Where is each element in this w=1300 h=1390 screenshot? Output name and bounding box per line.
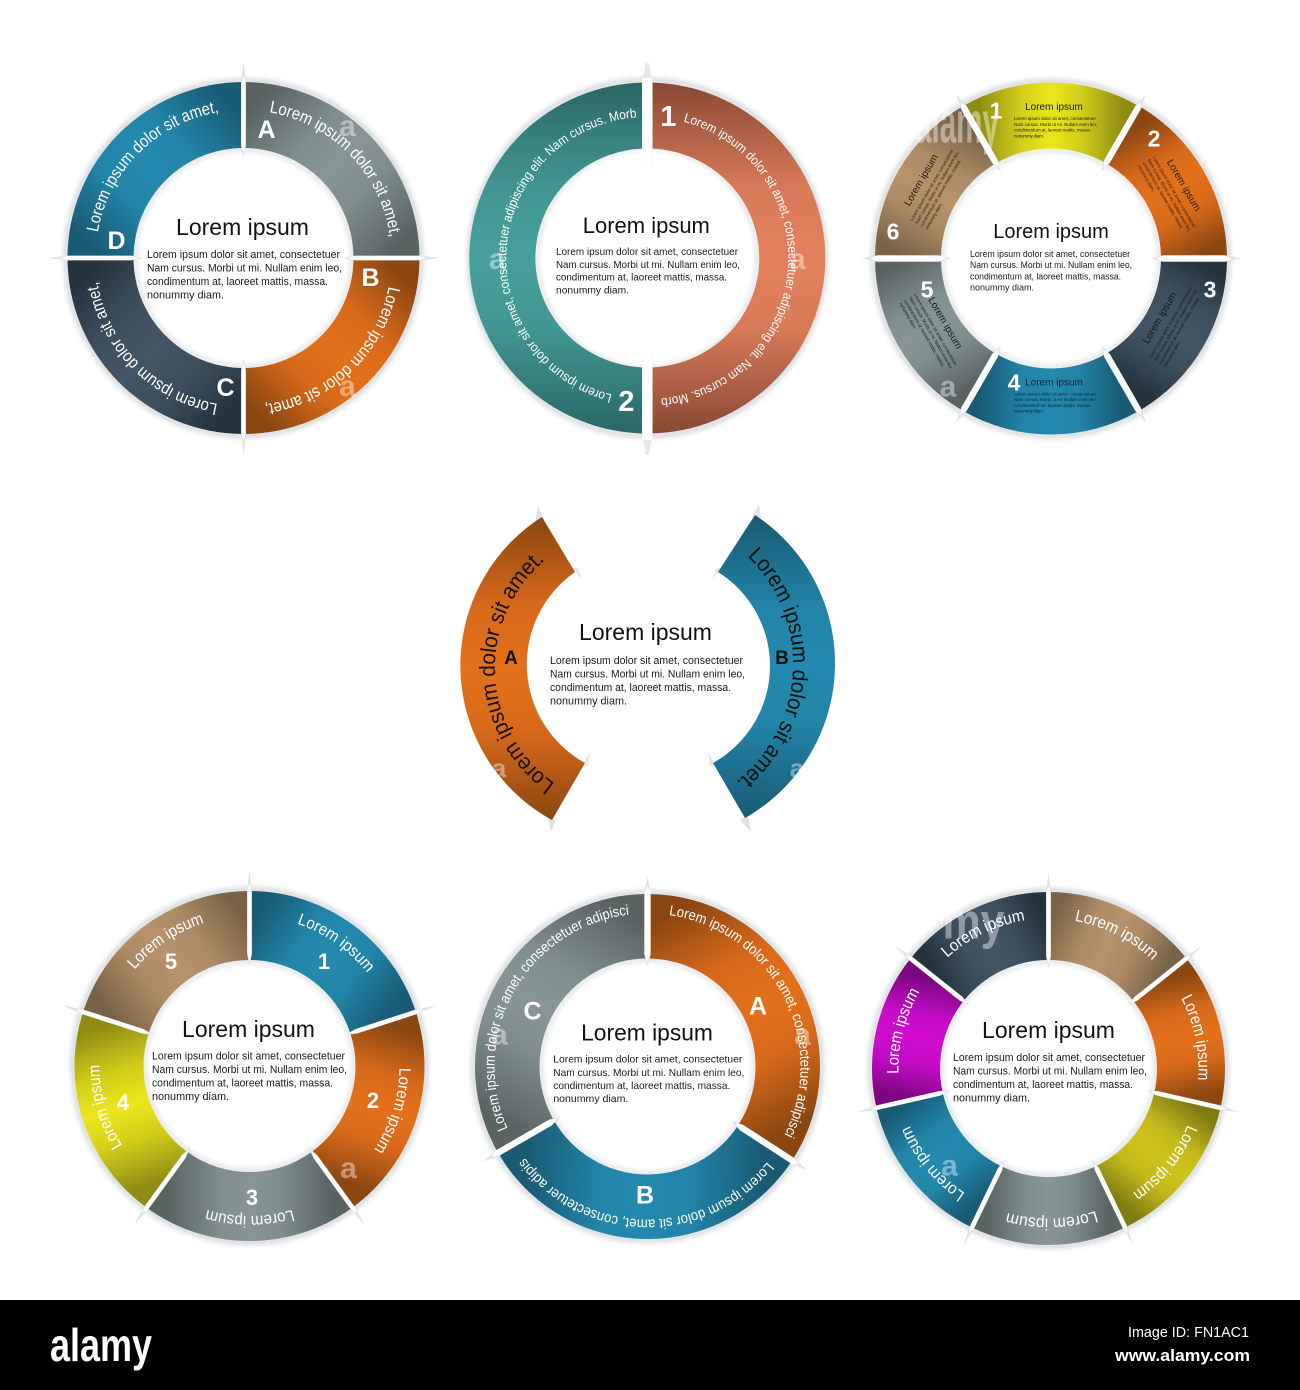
center text: Lorem ipsum dolor sit amet, consectetuer: [152, 1050, 345, 1062]
segment C: [68, 260, 242, 434]
segment 2: 2: [367, 1088, 379, 1113]
segment 3: [1106, 258, 1227, 411]
watermark: a: [941, 1150, 958, 1182]
center text: [553, 1020, 744, 1105]
segment 5: 5: [165, 949, 177, 974]
segment 5: nonummy diam.: [898, 301, 918, 330]
center text: nonummy diam.: [970, 282, 1034, 292]
segment 6: Lorem ipsum dolor sit amet, consectetuer: [909, 148, 955, 222]
center text: condimentum at, laoreet mattis, massa.: [147, 276, 328, 288]
watermark letters: a: [492, 753, 507, 783]
watermark letters: [489, 243, 806, 276]
segment 4: [74, 1014, 186, 1206]
watermark letters: [492, 753, 805, 783]
watermark letters: a: [489, 243, 506, 276]
segment 3: Lorem ipsum: [1141, 290, 1180, 346]
center text: Nam cursus. Morbi ut mi. Nullam enim leo,: [152, 1064, 347, 1076]
watermark letters: a: [794, 1018, 811, 1052]
center text: condimentum at, laoreet mattis, massa.: [556, 273, 727, 284]
center text: [147, 214, 342, 302]
ring 1: four segments A-D: [48, 62, 439, 454]
center text: Lorem ipsum dolor sit amet, consectetuer: [553, 1055, 743, 1066]
ring 2: two halves 1-2: [465, 63, 830, 455]
segment brown: [1050, 892, 1185, 1000]
segment gray: Lorem ipsum: [1006, 1211, 1098, 1230]
segment 4: 4: [117, 1090, 130, 1115]
segment 5: [875, 258, 996, 411]
segment 1: Lorem ipsum dolor sit amet, consectetuer adipiscing elit. Nam cursus. Morb: [662, 113, 797, 408]
watermark: [915, 90, 999, 404]
segment 5: Lorem ipsum: [925, 296, 964, 351]
segment 3: Lorem ipsum dolor sit amet, consectetuer: [1148, 286, 1193, 360]
center text: condimentum at, laoreet mattis, massa.: [152, 1078, 333, 1090]
center text: condimentum at, laoreet mattis, massa.: [970, 271, 1121, 281]
center text: Nam cursus. Morbi ut mi. Nullam enim leo,: [556, 260, 740, 271]
segment A: A: [749, 992, 767, 1020]
segment 6: [875, 106, 996, 258]
segment 1: [652, 82, 826, 434]
segment blue: [877, 1094, 1000, 1226]
center text: [556, 213, 740, 296]
segment B: [500, 1122, 790, 1239]
segment 2: Lorem ipsum dolor sit amet, consectetuer adipiscing elit. Nam cursus. Morb: [498, 108, 636, 403]
segment orange: Lorem ipsum: [1182, 994, 1208, 1080]
center text: Nam cursus. Morbi ut mi. Nullam enim leo,: [970, 260, 1132, 270]
center text: Lorem ipsum dolor sit amet, consectetuer: [550, 655, 743, 667]
segment 1: Lorem ipsum: [298, 913, 373, 972]
segment 2: [1106, 106, 1227, 258]
segment 6: condimentum at, laoreet mattis, massa.: [919, 158, 962, 228]
center text: Lorem ipsum: [581, 1020, 713, 1046]
segment 4: Lorem ipsum: [90, 1066, 122, 1150]
segment magenta: [872, 960, 963, 1106]
segment 2: 2: [618, 386, 634, 418]
center text: Nam cursus. Morbi ut mi. Nullam enim leo,: [953, 1066, 1147, 1078]
image id: Image ID: FN1AC1: [1128, 1324, 1249, 1341]
segment 1: Lorem ipsum dolor sit amet, consectetuer: [1014, 116, 1096, 121]
center text: Lorem ipsum: [176, 214, 309, 240]
segment A: Lorem ipsum dolor sit amet,: [270, 100, 400, 236]
segment navy: [912, 892, 1047, 1000]
segment 3: Nam cursus. Morbi ut mi. Nullam enim leo,: [1153, 288, 1198, 362]
segment 4: 4: [1008, 370, 1021, 396]
segment D: [68, 82, 242, 256]
footer logo: alamy: [50, 1319, 152, 1371]
center text: nonummy diam.: [553, 1094, 628, 1105]
segment B: [246, 260, 420, 434]
segment 5: 5: [921, 276, 934, 302]
watermark: my: [942, 894, 1005, 950]
segment A: A: [257, 116, 276, 144]
segment B: B: [361, 264, 380, 292]
arc A: [460, 506, 590, 832]
segment navy: Lorem ipsum: [940, 912, 1024, 957]
watermark: alamy: [915, 90, 999, 156]
segment 6: 6: [887, 218, 899, 244]
center text: Lorem ipsum dolor sit amet, consectetuer: [556, 247, 739, 258]
segment A: [246, 82, 420, 256]
segment 6: Nam cursus. Morbi ut mi. Nullam enim leo,: [914, 150, 960, 225]
segment A: Lorem ipsum dolor sit amet, consectetuer adipisci: [670, 905, 810, 1139]
arc A: A: [504, 648, 518, 669]
watermark: a: [940, 370, 957, 404]
segment 5: Lorem ipsum dolor sit amet, consectetuer: [913, 293, 959, 367]
center text: [152, 1016, 347, 1103]
center text: condimentum at, laoreet mattis, massa.: [953, 1079, 1133, 1091]
segment gray: [974, 1167, 1123, 1245]
segment 4: Lorem ipsum dolor sit amet, consectetuer: [1014, 392, 1096, 396]
footer bar: [0, 1300, 1300, 1390]
arc A: Lorem ipsum dolor sit amet.: [479, 555, 554, 795]
segment gold: [1097, 1094, 1220, 1226]
segment 3: nonummy diam.: [1162, 340, 1182, 368]
center text: Lorem ipsum dolor sit amet, consectetuer: [970, 249, 1130, 259]
center text: Nam cursus. Morbi ut mi. Nullam enim leo,: [553, 1068, 744, 1079]
arc B: B: [775, 648, 789, 669]
center text: [970, 221, 1132, 292]
segment 1: 1: [990, 98, 1003, 124]
watermark letters: a: [789, 243, 806, 276]
center text: nonummy diam.: [550, 696, 627, 708]
segment C: C: [216, 374, 235, 402]
segment 5: Lorem ipsum: [126, 915, 204, 969]
segment 2: Lorem ipsum dolor sit amet, consectetuer: [1152, 155, 1197, 229]
center text: Lorem ipsum: [982, 1017, 1115, 1043]
segment D: Lorem ipsum dolor sit amet,: [86, 102, 218, 232]
segment 1: [250, 891, 416, 1032]
segment blue: Lorem ipsum: [902, 1126, 964, 1202]
segment D: D: [107, 227, 126, 255]
ring 6: three segments A-C: [469, 878, 826, 1245]
ring 3: six segments 1-6: [861, 81, 1241, 436]
center text: Lorem ipsum: [583, 213, 710, 238]
segment 1: nonummy diam.: [1014, 133, 1044, 138]
segment magenta: Lorem ipsum: [887, 988, 920, 1073]
center text: Nam cursus. Morbi ut mi. Nullam enim leo,: [550, 668, 745, 680]
segment 4: [963, 354, 1139, 434]
center text: Lorem ipsum: [182, 1016, 315, 1042]
center text: nonummy diam.: [147, 290, 224, 302]
center text: [953, 1017, 1147, 1104]
center text: condimentum at, laoreet mattis, massa.: [550, 682, 731, 694]
watermark letters: a: [790, 753, 805, 783]
watermark: [941, 894, 1005, 1182]
segment 3: [148, 1152, 350, 1241]
center text: nonummy diam.: [152, 1091, 229, 1103]
center text: Lorem ipsum dolor sit amet, consectetuer: [953, 1052, 1145, 1064]
segment 3: condimentum at, laoreet mattis, massa.: [1158, 296, 1200, 365]
watermark letters: [491, 1018, 811, 1052]
segment gold: Lorem ipsum: [1133, 1126, 1198, 1199]
arc B: [708, 504, 835, 832]
segment 4: Nam cursus. Morbi ut mi. Nullam enim leo,: [1014, 397, 1097, 402]
segment 2: [312, 1014, 424, 1206]
segment 1: condimentum at, laoreet mattis, massa.: [1014, 128, 1091, 132]
watermark letters: a: [339, 370, 356, 403]
watermark letters: a: [339, 110, 356, 143]
segment 2: nonummy diam.: [1137, 164, 1156, 192]
segment B: Lorem ipsum dolor sit amet, consectetuer adipis: [520, 1159, 774, 1230]
segment 4: condimentum at, laoreet mattis, massa.: [1014, 403, 1091, 408]
segment 1: Nam cursus. Morbi ut mi. Nullam enim leo,: [1014, 122, 1097, 127]
segment 1: 1: [660, 101, 676, 133]
segment 6: Lorem ipsum: [903, 153, 941, 208]
center text: Lorem ipsum: [993, 221, 1109, 243]
center text: nonummy diam.: [953, 1092, 1030, 1104]
watermark letter: a: [340, 1152, 357, 1185]
segment 3: 3: [1204, 276, 1216, 302]
segment 3: Lorem ipsum: [206, 1210, 294, 1228]
segment 2: Lorem ipsum: [374, 1069, 411, 1153]
segment 1: [963, 83, 1139, 163]
segment orange: [1134, 960, 1225, 1106]
segment 2: Lorem ipsum: [1164, 158, 1202, 213]
segment 4: Lorem ipsum: [1025, 378, 1083, 388]
watermark letters: [339, 110, 356, 403]
watermark letters: a: [491, 1018, 508, 1052]
segment C: Lorem ipsum dolor sit amet,: [88, 282, 217, 416]
center text: condimentum at, laoreet mattis, massa.: [553, 1081, 730, 1092]
segment 1: Lorem ipsum: [1025, 102, 1083, 113]
center text: nonummy diam.: [556, 286, 629, 296]
ring 4: two side arcs A and B: [460, 504, 835, 832]
center text: [550, 619, 745, 708]
segment 3: 3: [246, 1185, 258, 1210]
center text: Lorem ipsum: [579, 619, 712, 645]
arc B: Lorem ipsum dolor sit amet.: [737, 546, 808, 788]
segment 1: 1: [318, 949, 330, 974]
segment B: B: [636, 1182, 654, 1210]
segment 2: Nam cursus. Morbi ut mi. Nullam enim leo,: [1147, 158, 1192, 232]
center text: Lorem ipsum dolor sit amet, consectetuer: [147, 249, 340, 261]
segment 5: condimentum at, laoreet mattis, massa.: [903, 299, 946, 368]
segment 4: nonummy diam.: [1014, 408, 1044, 414]
separator bars: [642, 63, 653, 455]
segment 6: nonummy diam.: [924, 202, 943, 230]
segment 5: [84, 891, 248, 1032]
segment brown: Lorem ipsum: [1076, 910, 1157, 960]
segment 2: 2: [1148, 126, 1160, 152]
segment C: Lorem ipsum dolor sit amet, consectetuer adipisci: [486, 904, 628, 1132]
center text: Nam cursus. Morbi ut mi. Nullam enim leo,: [147, 262, 342, 274]
segment C: C: [523, 998, 542, 1026]
website: www.alamy.com: [1114, 1346, 1250, 1365]
segment B: Lorem ipsum dolor sit amet,: [266, 288, 400, 414]
ring 5: five segments 1-5: [62, 870, 436, 1247]
segment 2: condimentum at, laoreet mattis, massa.: [1142, 161, 1184, 230]
ring 7: seven segments: [857, 873, 1240, 1251]
segment 5: Nam cursus. Morbi ut mi. Nullam enim leo,: [908, 296, 954, 370]
